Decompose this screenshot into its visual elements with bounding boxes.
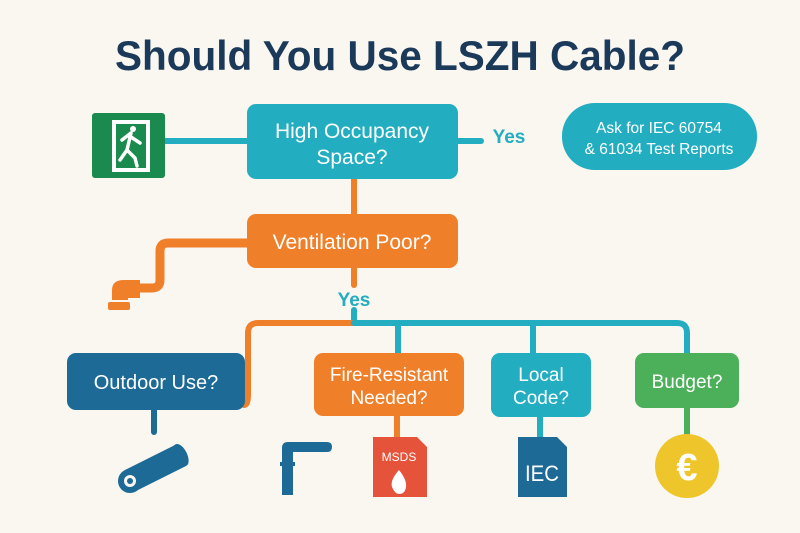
label: yes: Yes [493,127,525,148]
box: local code [491,353,591,417]
box: high occupancy [247,104,458,179]
title: Should You Use LSZH Cable? [115,32,685,79]
icon: iec document [518,437,567,497]
connector lines [140,141,687,437]
box: outdoor use [67,353,245,410]
icon: blue pipe [280,442,332,495]
label: yes: Yes [338,290,370,311]
box: high occupancy: Space? [316,146,388,169]
box: local code: Local [518,365,564,386]
icon: iec document: IEC [525,461,559,486]
icon: msds document [373,437,427,497]
box: fire-resistant: Needed? [350,388,428,409]
box: local code: Code? [513,388,569,409]
callout: test reports: & 61034 Test Reports [585,141,734,158]
callout: test reports: Ask for IEC 60754 [596,120,722,137]
box: ventilation: Ventilation Poor? [273,231,431,254]
icon: msds document: MSDS [382,450,416,464]
box: budget: Budget? [652,372,722,393]
box: outdoor use: Outdoor Use? [94,372,218,394]
icon: orange pipe elbow [108,280,140,310]
box: budget [635,353,739,408]
box: fire-resistant: Fire-Resistant [330,365,449,386]
icon: euro coin [655,434,719,498]
icon: exit sign [92,113,165,178]
box: ventilation [247,214,458,268]
icon: euro coin: € [676,447,698,489]
callout: test reports [562,103,757,170]
box: fire-resistant [314,353,464,416]
box: high occupancy: High Occupancy [275,120,430,143]
icon: cable [118,442,192,493]
